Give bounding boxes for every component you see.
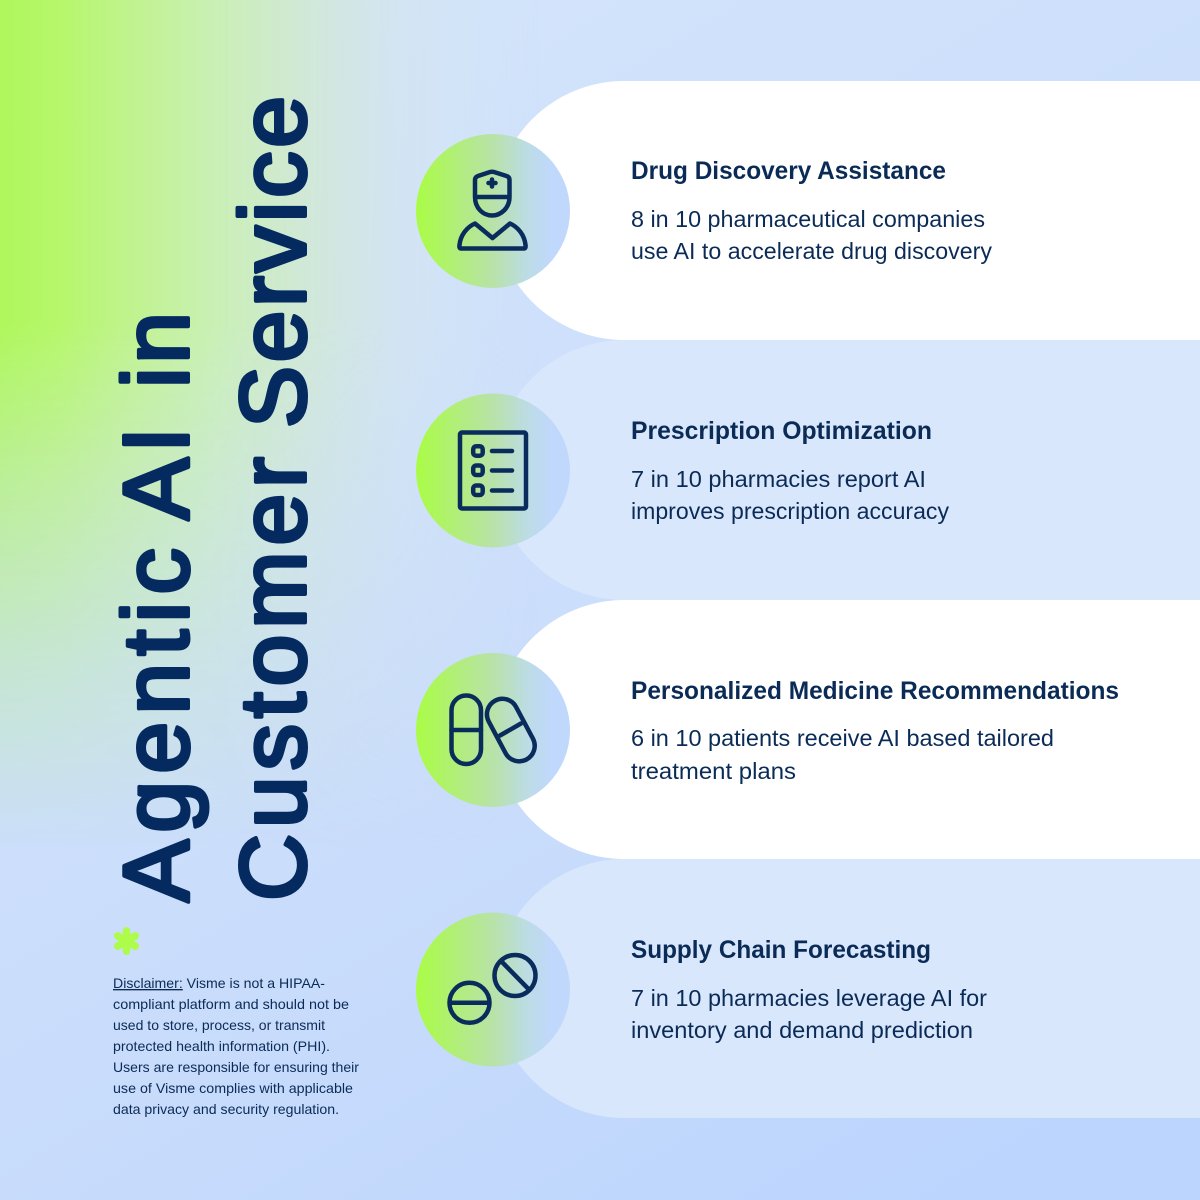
panel background (495, 859, 1200, 1118)
disclaimer: Users are responsible for ensuring their (113, 1060, 359, 1075)
body text (631, 466, 949, 524)
icon: asterisk (118, 931, 135, 951)
heading: Personalized Medicine Recommendations (631, 677, 1119, 705)
icon circle (416, 394, 570, 548)
body text: improves prescription accuracy (631, 498, 949, 524)
panel: drug discovery (416, 81, 1200, 340)
heading: Drug Discovery Assistance (631, 157, 946, 185)
body text: 7 in 10 pharmacies leverage AI for (631, 985, 987, 1011)
panel: supply chain (416, 859, 1200, 1118)
disclaimer: compliant platform and should not be (113, 997, 349, 1012)
icon: capsules (452, 693, 540, 767)
icon circle (416, 134, 570, 288)
panel: prescription optimization (416, 340, 1200, 600)
disclaimer: protected health information (PHI). (113, 1039, 330, 1054)
title: in (104, 312, 208, 388)
disclaimer: data privacy and security regulation. (113, 1102, 339, 1117)
body text: use AI to accelerate drug discovery (631, 238, 992, 264)
disclaimer: use of Visme complies with applicable (113, 1081, 353, 1096)
title: Service (221, 96, 325, 428)
panel: personalized medicine (416, 600, 1200, 859)
body text (631, 206, 992, 264)
panel background (495, 81, 1200, 340)
title: Customer (221, 457, 325, 901)
body text: inventory and demand prediction (631, 1017, 973, 1043)
icon: nurse (459, 172, 526, 248)
panel background (495, 600, 1200, 859)
icon circle (416, 912, 570, 1066)
body text: treatment plans (631, 758, 796, 784)
body text (631, 725, 1054, 784)
body text (631, 985, 987, 1043)
icon: tablets (450, 955, 536, 1023)
disclaimer: used to store, process, or transmit (113, 1018, 325, 1033)
panel background (494, 340, 1200, 600)
body text: 7 in 10 pharmacies report AI (631, 466, 926, 492)
icon circle (416, 653, 570, 807)
icon: checklist (460, 432, 526, 508)
title: AI (104, 427, 208, 520)
disclaimer (113, 976, 359, 1117)
heading: Supply Chain Forecasting (631, 936, 931, 964)
disclaimer: Disclaimer: Visme is not a HIPAA- (113, 976, 325, 991)
heading: Prescription Optimization (631, 417, 932, 445)
title: Agentic (104, 548, 208, 902)
body text: 6 in 10 patients receive AI based tailored (631, 725, 1054, 751)
title (104, 96, 325, 902)
body text: 8 in 10 pharmaceutical companies (631, 206, 985, 232)
